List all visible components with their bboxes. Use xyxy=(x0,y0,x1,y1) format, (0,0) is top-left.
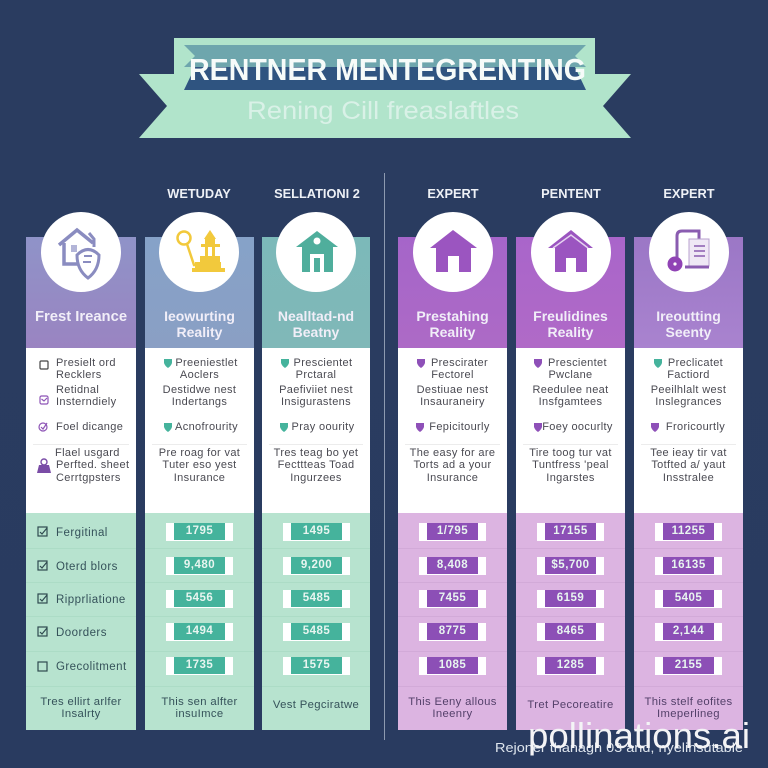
panel: column 1 xyxy=(26,212,136,730)
panel: column 1: Recklers xyxy=(56,369,102,381)
panel: column 5: Foey oocurlty xyxy=(542,421,613,433)
icon: purple check xyxy=(39,395,49,405)
panel: column 1: Flael usgard xyxy=(55,447,120,459)
panel: column 5 xyxy=(516,212,625,730)
panel: column 2: 1735 xyxy=(186,659,213,671)
panel: column 2: Acnofrourity xyxy=(175,421,238,433)
panel: column 1: Insalrty xyxy=(61,708,101,720)
feature list xyxy=(164,359,172,368)
feature list xyxy=(654,359,662,368)
panel: column 3: Prctaral xyxy=(296,369,336,381)
panel: column 3: 1575 xyxy=(303,659,330,671)
panel: column 5: 17155 xyxy=(553,525,588,537)
panel: column 1: Oterd blors xyxy=(56,561,118,573)
watermark: pollinations.ai xyxy=(528,715,750,756)
icon: purple target xyxy=(38,422,48,432)
icon: house with shield xyxy=(41,212,121,292)
panel: column 3: Insigurastens xyxy=(281,396,351,408)
panel: column 1: Fergitinal xyxy=(56,527,108,539)
panel: column 4: 8775 xyxy=(439,625,466,637)
panel: column 5: Insfgamtees xyxy=(539,396,602,408)
panel: column 1: Doorders xyxy=(56,627,107,639)
panel: column 1: Insterndiely xyxy=(56,396,116,408)
panel: column 5: Tire toog tur vat xyxy=(529,447,612,459)
heading: Frest Ireance xyxy=(35,309,127,325)
comparison badges xyxy=(516,548,625,549)
panel: column 3: Tres teag bo yet xyxy=(274,447,358,459)
panel: column 6: Tee ieay tir vat xyxy=(650,447,727,459)
panel: column 2: 5456 xyxy=(186,592,213,604)
panel: column 1: Foel dicange xyxy=(56,421,123,433)
column label: Expert right: EXPERT xyxy=(663,186,715,201)
panel: column 3: Paefiviiet nest xyxy=(279,384,353,396)
panel: column 2: Insurance xyxy=(174,472,225,484)
panel: column 4: Insauraneiry xyxy=(420,396,485,408)
panel: column 5: $5,700 xyxy=(551,559,590,571)
panel: column 4: Fepicitourly xyxy=(429,421,490,433)
title banner xyxy=(139,38,631,138)
panel: column 3: Fecttteas Toad xyxy=(278,459,354,471)
panel: column 2 xyxy=(145,212,254,730)
panel: column 6: 2,144 xyxy=(673,625,704,637)
panel: column 5: 1285 xyxy=(557,659,584,671)
panel: column 4: 7455 xyxy=(439,592,466,604)
panel: column 6: Inslegrances xyxy=(655,396,722,408)
vertical divider xyxy=(384,173,385,740)
comparison badges xyxy=(398,548,507,549)
heading: Nealltad-nd xyxy=(278,308,354,324)
panel: column 6: Peeilhlalt west xyxy=(651,384,726,396)
bottom note: Rejoner thanagh 03 and, nyelinsutable xyxy=(495,741,743,755)
panel: column 4: 8,408 xyxy=(437,559,468,571)
panel: column 4: Fectorel xyxy=(431,369,474,381)
panel: column 6: Insstralee xyxy=(663,472,714,484)
panel: column 4: Reality xyxy=(430,324,475,340)
panel: column 5: Reedulee neat xyxy=(532,384,609,396)
panel: column 2: Indertangs xyxy=(172,396,227,408)
panel: column 3: 9,200 xyxy=(301,559,332,571)
footer note: Tres ellirt arlfer xyxy=(40,696,122,708)
column label: Expert: EXPERT xyxy=(427,186,479,201)
panel: column 6: 16135 xyxy=(671,559,706,571)
panel: column 2: 1795 xyxy=(186,525,213,537)
panel: column 6: 5405 xyxy=(675,592,702,604)
footer note: Vest Pegciratwe xyxy=(273,699,359,711)
panel: column 2: 9,480 xyxy=(184,559,215,571)
icon: key and tower xyxy=(159,212,239,292)
panel: column 4: Insurance xyxy=(427,472,478,484)
panel: column 2: Tuter eso yest xyxy=(162,459,237,471)
column label: Sellation 2: SELLATIONI 2 xyxy=(274,186,360,201)
panel: column 3: 1495 xyxy=(303,525,330,537)
feature list xyxy=(281,359,289,368)
panel: column 6: Seenty xyxy=(666,324,711,340)
column label: Pentent: PENTENT xyxy=(541,186,601,201)
panel: column 2: Preeniestlet xyxy=(175,357,238,369)
icon: empty checkbox xyxy=(39,360,49,370)
title banner: RENTNER MENTEGRENTING xyxy=(189,52,586,87)
panel: column 2: Pre roag for vat xyxy=(159,447,240,459)
heading: Ireoutting xyxy=(656,308,721,324)
panel: column 3: 5485 xyxy=(303,625,330,637)
panel: column 4: Destiuae nest xyxy=(417,384,488,396)
panel: column 6: Factiord xyxy=(667,369,710,381)
panel: column 3: Pray oourity xyxy=(292,421,354,433)
panel: column 3 xyxy=(262,212,370,730)
comparison badges xyxy=(262,548,370,549)
panel: column 4 xyxy=(398,212,507,730)
panel: column 1: Grecolitment xyxy=(56,661,127,673)
panel: column 3: Ingurzees xyxy=(290,472,342,484)
panel: column 5: 8465 xyxy=(557,625,584,637)
icon: document xyxy=(649,212,729,292)
panel: column 1: Retidnal xyxy=(56,384,99,396)
feature list: Presielt ord xyxy=(56,357,116,369)
panel: column 6: Froricourtly xyxy=(666,421,725,433)
panel: column 5: Prescientet xyxy=(548,357,607,369)
panel: column 4: Prescirater xyxy=(431,357,488,369)
panel: column 5: 6159 xyxy=(557,592,584,604)
icon: purple house with roof line xyxy=(531,212,611,292)
panel: column 4: Ineenry xyxy=(432,708,473,720)
panel: column 6 xyxy=(634,212,743,730)
panel: column 5: Tuntfress 'peal xyxy=(532,459,609,471)
icon: purple house xyxy=(413,212,493,292)
heading: Ieowurting xyxy=(164,308,235,324)
panel: column 4: 1085 xyxy=(439,659,466,671)
footer note: This Eeny allous xyxy=(408,696,497,708)
footer note: This sen alfter xyxy=(161,696,238,708)
footer note: This stelf eofites xyxy=(645,696,732,708)
panel: column 6: 11255 xyxy=(672,525,705,537)
panel: column 6: Preclicatet xyxy=(668,357,723,369)
footer note: Tret Pecoreatire xyxy=(527,699,614,711)
panel: column 5: Ingarstes xyxy=(546,472,595,484)
panel: column 6: Totfted a/ yaut xyxy=(651,459,726,471)
panel: column 1: Perfted. sheet xyxy=(56,459,129,471)
panel: column 1: Ripprliatione xyxy=(56,594,126,606)
heading: Freulidines xyxy=(533,308,608,324)
panel: column 2: insuImce xyxy=(175,708,224,720)
column label: Wetuday: WETUDAY xyxy=(167,186,231,201)
panel: column 3: Prescientet xyxy=(294,357,352,369)
comparison rows xyxy=(26,548,136,549)
panel: column 2: Aoclers xyxy=(180,369,219,381)
panel: column 3: Beatny xyxy=(293,324,339,340)
comparison badges xyxy=(634,548,743,549)
panel: column 2: 1494 xyxy=(186,625,213,637)
icon: teal house xyxy=(276,212,356,292)
panel: column 6: Imeperlineg xyxy=(657,708,720,720)
title banner: Rening Cill freaslaftles xyxy=(247,97,519,125)
panel: column 6: 2155 xyxy=(675,659,702,671)
panel: column 4: 1/795 xyxy=(437,525,468,537)
panel: column 3: 5485 xyxy=(303,592,330,604)
feature list xyxy=(534,359,542,368)
icon: purple bag xyxy=(37,458,51,473)
panel: column 1: Cerrtgpsters xyxy=(56,472,121,484)
panel: column 5: Reality xyxy=(548,324,593,340)
feature list xyxy=(417,359,425,368)
panel: column 2: Destidwe nest xyxy=(163,384,236,396)
panel: column 5: Pwclane xyxy=(548,369,593,381)
comparison badges xyxy=(145,548,254,549)
panel: column 4: The easy for are xyxy=(410,447,495,459)
heading: Prestahing xyxy=(416,308,489,324)
panel: column 2: Reality xyxy=(177,324,222,340)
panel: column 4: Torts ad a your xyxy=(413,459,492,471)
